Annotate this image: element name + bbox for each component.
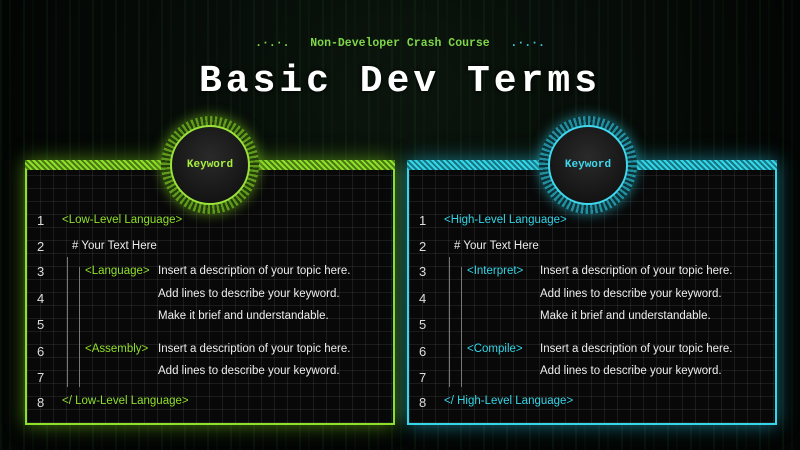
panel: high-level: Add lines to describe your keyword. <box>540 365 722 377</box>
panel: low-level <box>25 160 395 425</box>
panel: low-level: <Low-Level Language> <box>62 214 182 226</box>
panel: low-level: <Language> <box>85 265 150 277</box>
title: Basic Dev Terms <box>199 60 601 103</box>
panel: high-level: <Compile> <box>467 343 523 355</box>
panel: high-level: Add lines to describe your keyword. <box>540 288 722 300</box>
panel: low-level: Add lines to describe your keyword. <box>158 288 340 300</box>
panel: high-level: Make it brief and understandable. <box>540 310 711 322</box>
panel: low-level: 4 <box>37 291 44 306</box>
panel: high-level: 7 <box>419 370 426 385</box>
panel: low-level: </ Low-Level Language> <box>62 395 189 407</box>
panel: high-level: <Interpret> <box>467 265 523 277</box>
panel: high-level: Insert a description of your topic here. <box>540 343 732 355</box>
panel: high-level: 2 <box>419 239 426 254</box>
icon: keyword circle blue: Keyword <box>565 159 611 171</box>
panel: high-level: 4 <box>419 291 426 306</box>
subtitle: .·.·. Non-Developer Crash Course .·.·. <box>255 37 545 50</box>
panel: low-level: Insert a description of your topic here. <box>158 265 350 277</box>
icon: keyword circle green: Keyword <box>187 159 233 171</box>
panel: high-level <box>407 160 777 425</box>
panel: low-level: 3 <box>37 264 44 279</box>
panel: high-level: 8 <box>419 395 426 410</box>
panel: high-level: # Your Text Here <box>454 240 539 252</box>
icon: keyword circle green <box>161 116 259 214</box>
panel: low-level: 7 <box>37 370 44 385</box>
panel: high-level: 1 <box>419 213 426 228</box>
panel: low-level: Insert a description of your topic here. <box>158 343 350 355</box>
panel: high-level: 6 <box>419 344 426 359</box>
panel: high-level: 5 <box>419 317 426 332</box>
panel: low-level: Add lines to describe your keyword. <box>158 365 340 377</box>
panel: high-level: 3 <box>419 264 426 279</box>
panel: high-level: </ High-Level Language> <box>444 395 573 407</box>
panel: low-level: 8 <box>37 395 44 410</box>
panel: low-level: 2 <box>37 239 44 254</box>
icon: keyword circle blue <box>539 116 637 214</box>
panel: low-level: # Your Text Here <box>72 240 157 252</box>
panel: low-level: Make it brief and understandable. <box>158 310 329 322</box>
panel: low-level: 1 <box>37 213 44 228</box>
panel: low-level: 6 <box>37 344 44 359</box>
panel: high-level: <High-Level Language> <box>444 214 567 226</box>
panel: low-level: 5 <box>37 317 44 332</box>
panel: low-level: <Assembly> <box>85 343 148 355</box>
panel: high-level: Insert a description of your topic here. <box>540 265 732 277</box>
